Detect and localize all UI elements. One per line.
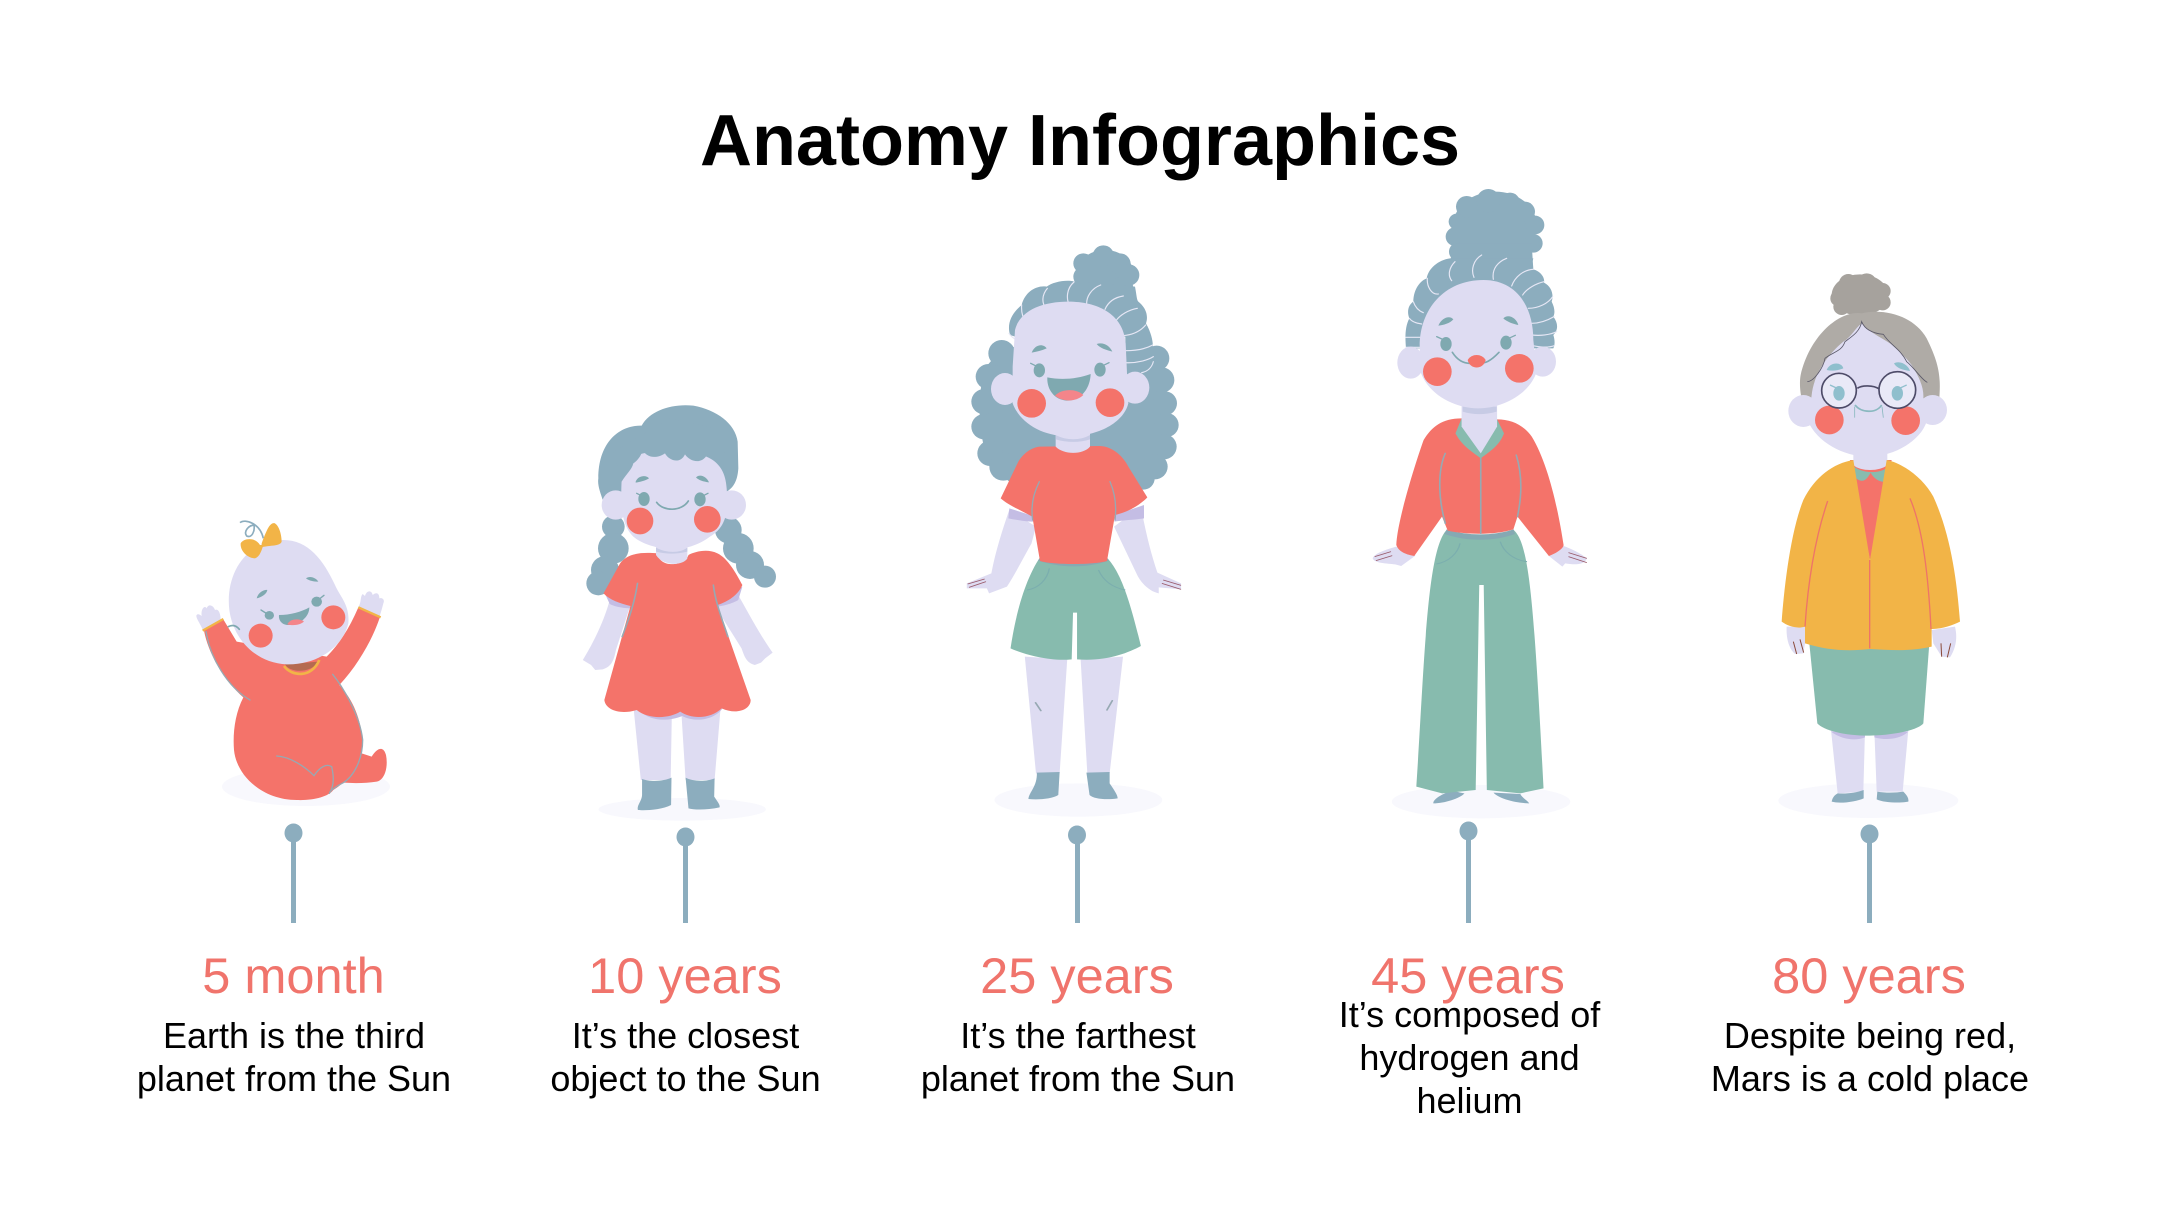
adult neck <box>1462 400 1497 453</box>
elderly skirt <box>1809 643 1929 736</box>
elderly eyes <box>1830 385 1907 401</box>
elderly collar <box>1851 463 1892 482</box>
elderly glasses <box>1822 372 1916 408</box>
figure: baby, 5 month <box>196 521 390 806</box>
girl smile <box>657 501 688 509</box>
woman mouth <box>1047 374 1091 401</box>
elderly brows <box>1827 362 1910 371</box>
woman arms <box>967 507 1181 593</box>
girl head <box>602 418 746 564</box>
figure: girl, 10 years <box>583 405 776 821</box>
pin: 10 years <box>676 828 694 923</box>
baby romper seams <box>206 632 363 793</box>
elderly neck <box>1853 450 1887 470</box>
baby foot <box>343 749 387 783</box>
description: 25 years: planet from the Sun <box>921 1058 1235 1099</box>
woman ground shadow <box>994 783 1162 817</box>
adult finger lines <box>1375 552 1587 563</box>
elderly shoes <box>1832 790 1908 803</box>
adult shoes <box>1433 791 1529 803</box>
baby romper <box>204 607 380 800</box>
adult neck shadow <box>1463 407 1497 414</box>
woman shirt seams <box>1032 482 1116 520</box>
baby ear line <box>228 625 239 629</box>
adult lips <box>1468 355 1486 367</box>
girl neck <box>656 542 687 564</box>
adult waistband <box>1444 529 1515 540</box>
elderly ground shadow <box>1778 783 1958 818</box>
woman face <box>1013 302 1128 436</box>
baby hair curl <box>240 521 263 538</box>
label: 45 years: 45 years <box>1371 947 1565 1004</box>
elderly bun <box>1830 273 1891 316</box>
adult cheeks <box>1423 354 1534 386</box>
label: 25 years: 25 years <box>980 947 1174 1004</box>
title: Anatomy Infographics <box>700 101 1460 181</box>
elderly face <box>1808 323 1927 457</box>
woman t-shirt <box>1001 446 1147 564</box>
woman shoes <box>1028 772 1118 799</box>
woman hair back <box>971 245 1179 490</box>
girl cheeks <box>627 506 721 534</box>
description: 80 years: Despite being red, <box>1724 1015 2016 1056</box>
description: 80 years: Mars is a cold place <box>1711 1058 2029 1099</box>
woman hair strands <box>1009 282 1153 373</box>
woman pockets <box>1027 568 1125 590</box>
adult collar <box>1455 418 1504 458</box>
woman finger lines <box>968 579 1181 589</box>
girl body <box>583 551 773 821</box>
girl boots <box>638 778 720 810</box>
elderly smile <box>1855 405 1883 418</box>
label: 80 years: 80 years <box>1772 947 1966 1004</box>
pin: 80 years <box>1860 824 1878 923</box>
girl legs <box>634 710 720 780</box>
elderly head <box>1788 273 1947 457</box>
adult ground shadow <box>1392 785 1570 818</box>
girl fringe <box>613 418 738 482</box>
label: 5 month: 5 month <box>202 947 385 1004</box>
figure: young woman, 25 years <box>967 245 1181 817</box>
adult jacket <box>1396 418 1564 556</box>
baby head <box>229 540 349 664</box>
baby ground shadow <box>222 767 390 806</box>
woman hair crown <box>1009 281 1154 373</box>
adult eyes and brows <box>1437 316 1518 351</box>
description: 5 month: Earth is the third <box>163 1015 425 1056</box>
pin: 45 years <box>1460 822 1478 923</box>
girl ears <box>602 490 746 520</box>
woman legs <box>1025 657 1123 773</box>
adult head <box>1397 189 1557 414</box>
woman head and shirt <box>991 281 1154 564</box>
woman lower body <box>967 507 1181 817</box>
description: 5 month: planet from the Sun <box>137 1058 451 1099</box>
elderly legs <box>1831 730 1908 793</box>
figure: elderly woman, 80 years <box>1778 273 1960 818</box>
elderly cardigan seams <box>1805 498 1931 648</box>
elderly hairline <box>1807 322 1927 382</box>
adult hair strands <box>1406 255 1557 347</box>
elderly cheeks <box>1815 406 1920 435</box>
girl hair back and braids <box>586 405 776 595</box>
girl dress <box>604 551 751 717</box>
elderly cardigan <box>1782 460 1960 650</box>
girl arms <box>583 595 773 670</box>
adult trousers <box>1416 529 1544 793</box>
elderly finger lines <box>1793 639 1951 657</box>
woman shorts <box>1011 557 1141 660</box>
woman cheeks <box>1017 388 1124 418</box>
woman sleeve shadow <box>1008 505 1144 522</box>
baby eyes and brows <box>257 577 324 620</box>
girl ground shadow <box>599 798 766 821</box>
adult jacket seams <box>1440 453 1521 533</box>
pin: 25 years <box>1068 826 1086 923</box>
baby collar <box>284 660 319 674</box>
girl face <box>621 452 727 549</box>
woman eyes and brows <box>1031 343 1112 377</box>
elderly lower body <box>1778 450 1960 818</box>
adult face <box>1420 280 1537 408</box>
description: 45 years: hydrogen and <box>1359 1037 1580 1078</box>
elderly vest <box>1850 460 1892 561</box>
description: 45 years: It’s composed of <box>1339 994 1601 1035</box>
elderly hair <box>1800 312 1940 398</box>
woman knee marks <box>1036 701 1112 711</box>
girl dress underside <box>606 587 742 720</box>
description: 10 years: It’s the closest <box>572 1015 799 1056</box>
woman waistband <box>1038 557 1109 566</box>
elderly ears <box>1788 395 1947 427</box>
adult pockets <box>1436 542 1527 564</box>
baby hands <box>196 591 384 631</box>
elderly hands <box>1787 627 1956 657</box>
baby mouth <box>279 607 309 625</box>
figure: adult woman, 45 years <box>1373 189 1587 818</box>
adult bun <box>1446 189 1544 269</box>
elderly skirt shadow <box>1831 732 1908 739</box>
description: 10 years: object to the Sun <box>550 1058 821 1099</box>
description: 45 years: helium <box>1416 1080 1523 1121</box>
baby cuffs <box>203 607 381 631</box>
adult smile <box>1452 352 1499 363</box>
adult ears <box>1397 347 1556 379</box>
adult hands <box>1373 546 1587 567</box>
pin: 5 month <box>284 824 302 923</box>
girl dress seams <box>622 583 728 637</box>
description: 25 years: It’s the farthest <box>960 1015 1196 1056</box>
label: 10 years: 10 years <box>588 947 782 1004</box>
girl eyes and brows <box>636 476 709 506</box>
adult upper body <box>1373 400 1587 567</box>
woman ears <box>991 372 1149 405</box>
woman neck <box>1056 430 1090 453</box>
baby cheeks <box>249 605 345 648</box>
adult hair crown <box>1405 258 1557 348</box>
baby bow <box>241 523 282 558</box>
